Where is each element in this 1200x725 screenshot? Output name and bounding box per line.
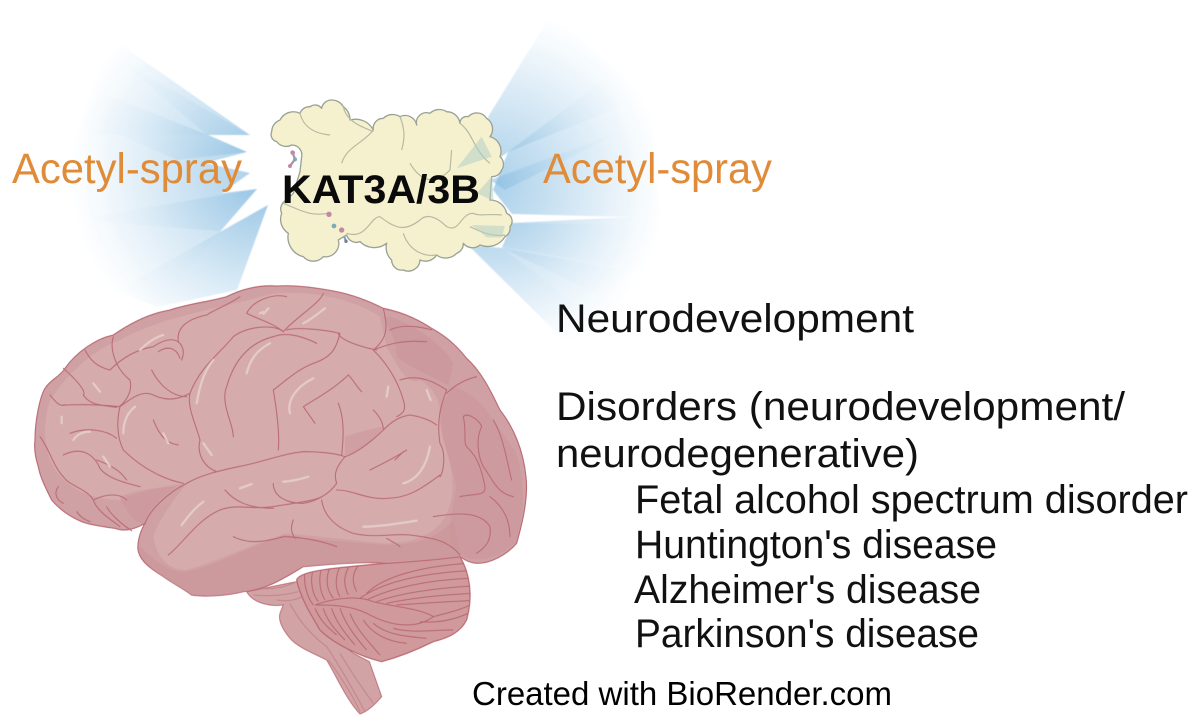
cerebrum shaded patches	[120, 317, 523, 596]
brainstem	[247, 582, 382, 714]
label: Acetyl-spray right: Acetyl-spray	[543, 145, 772, 193]
protein surface	[271, 100, 512, 271]
heading: Disorders: Disorders (neurodevelopment/	[556, 385, 1126, 429]
protein ligand strands	[290, 153, 346, 241]
brain illustration	[35, 286, 527, 714]
right fan base	[468, 13, 662, 363]
ligand beads	[288, 150, 348, 243]
light rays: right spray	[468, 13, 662, 363]
list of disorders: Huntington's disease	[635, 523, 997, 567]
left fan base	[55, 30, 268, 307]
list of disorders: Parkinson's disease	[635, 612, 979, 656]
heading: Disorders	[556, 385, 1126, 476]
cerebrum sulci	[40, 293, 513, 555]
label: KAT3A/3B: KAT3A/3B	[282, 168, 480, 212]
cerebrum highlights	[62, 308, 431, 527]
credit line: Created with BioRender.com	[472, 675, 892, 712]
cerebellum	[297, 557, 472, 662]
heading: Disorders: neurodegenerative)	[556, 432, 919, 476]
text block: neurodevelopment and disorders	[556, 297, 1188, 656]
heading: Neurodevelopment: Neurodevelopment	[556, 297, 914, 341]
list of disorders	[634, 478, 1188, 656]
left fan streaks	[60, 60, 268, 307]
right fan streaks	[468, 75, 640, 363]
list of disorders: Fetal alcohol spectrum disorder	[635, 478, 1188, 522]
protein: KAT3A/3B structure	[271, 100, 512, 271]
cerebrum lighter surface	[45, 293, 453, 570]
brainstem lines	[253, 582, 373, 712]
cerebellum folia	[305, 563, 472, 655]
protein surface folds	[283, 107, 505, 255]
cerebrum	[35, 286, 527, 596]
translucent ray overlays on protein	[457, 137, 505, 237]
list of disorders: Alzheimer's disease	[634, 568, 981, 612]
label: Acetyl-spray left: Acetyl-spray	[12, 145, 242, 193]
light rays: left spray	[55, 30, 268, 307]
